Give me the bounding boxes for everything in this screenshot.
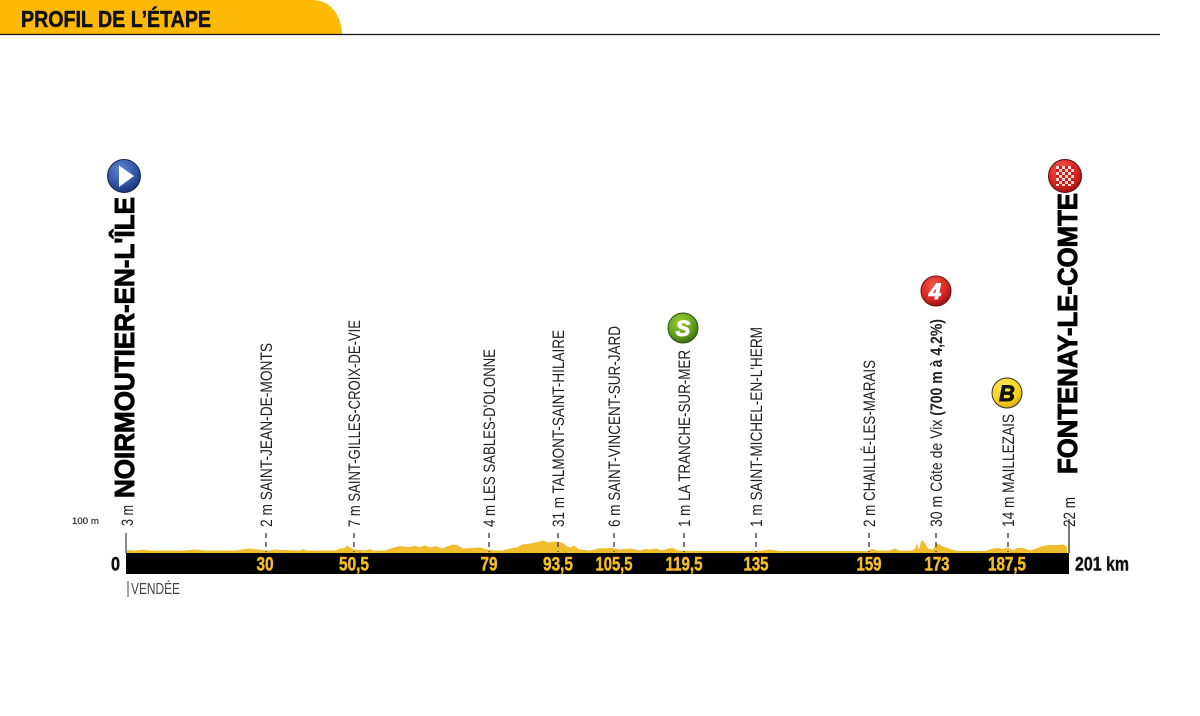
axis end lines and dashed location markers <box>126 519 1069 553</box>
axis bar with kilometre markers: 30 <box>256 554 274 576</box>
elevation scale label: 100 m <box>72 516 99 526</box>
zero label: 0 <box>111 554 120 576</box>
finish town label: 22 m <box>1060 497 1079 527</box>
icon: bonus point <box>992 378 1022 408</box>
location: Saint-Gilles-Croix-de-Vie: 7 m SAINT-GILLES-CROIX-DE-VIE <box>345 320 364 527</box>
icon: intermediate sprint: S <box>676 316 691 341</box>
icon: intermediate sprint <box>668 313 698 343</box>
finish town label: FONTENAY-LE-COMTE <box>1052 193 1083 474</box>
start town label: NOIRMOUTIER-EN-L'ÎLE <box>109 197 140 498</box>
axis bar with kilometre markers: 159 <box>856 554 882 576</box>
icon: start play <box>108 160 140 192</box>
header: stage profile title <box>0 0 1160 34</box>
location: Saint-Jean-de-Monts: 2 m SAINT-JEAN-DE-MONTS <box>257 343 276 527</box>
header: stage profile title: PROFIL DE L’ÉTAPE <box>21 5 211 32</box>
location: La Tranche-sur-Mer: 1 m LA TRANCHE-SUR-MER <box>675 350 694 527</box>
axis bar with kilometre markers: 173 <box>924 554 950 576</box>
icon: category 4 climb: 4 <box>928 279 941 304</box>
axis bar with kilometre markers: 105,5 <box>596 554 633 576</box>
axis bar with kilometre markers: 93,5 <box>543 554 573 576</box>
axis bar with kilometre markers <box>126 553 1069 576</box>
location: Talmont-Saint-Hilaire: 31 m TALMONT-SAINT-HILAIRE <box>549 330 568 527</box>
axis bar with kilometre markers: 135 <box>744 554 769 576</box>
icon: bonus point: B <box>999 381 1015 406</box>
location: Chaillé-les-Marais: 2 m CHAILLÉ-LES-MARAIS <box>860 360 879 527</box>
total distance: 201 km <box>1075 554 1129 576</box>
location: Maillezais: 14 m MAILLEZAIS <box>999 414 1018 527</box>
start town label: 3 m <box>118 505 137 526</box>
axis bar with kilometre markers: 187,5 <box>988 554 1026 576</box>
department label <box>128 579 180 598</box>
location: Saint-Vincent-sur-Jard: 6 m SAINT-VINCENT-SUR-JARD <box>605 326 624 527</box>
icon: finish chequered flag <box>1048 160 1082 192</box>
axis bar with kilometre markers: 50,5 <box>339 554 369 576</box>
axis bar with kilometre markers: 79 <box>480 554 498 576</box>
elevation profile <box>127 540 1067 553</box>
location: Saint-Michel-en-l'Herm: 1 m SAINT-MICHEL-EN-L'HERM <box>747 327 766 527</box>
location: Les Sables-d'Olonne: 4 m LES SABLES-D'OLONNE <box>480 349 499 527</box>
axis bar with kilometre markers: 119,5 <box>666 554 703 576</box>
icon: category 4 climb <box>921 276 951 306</box>
location: Côte de Vix: 30 m Côte de Vix (700 m à 4,2%) <box>927 319 946 527</box>
department label: VENDÉE <box>131 579 180 598</box>
